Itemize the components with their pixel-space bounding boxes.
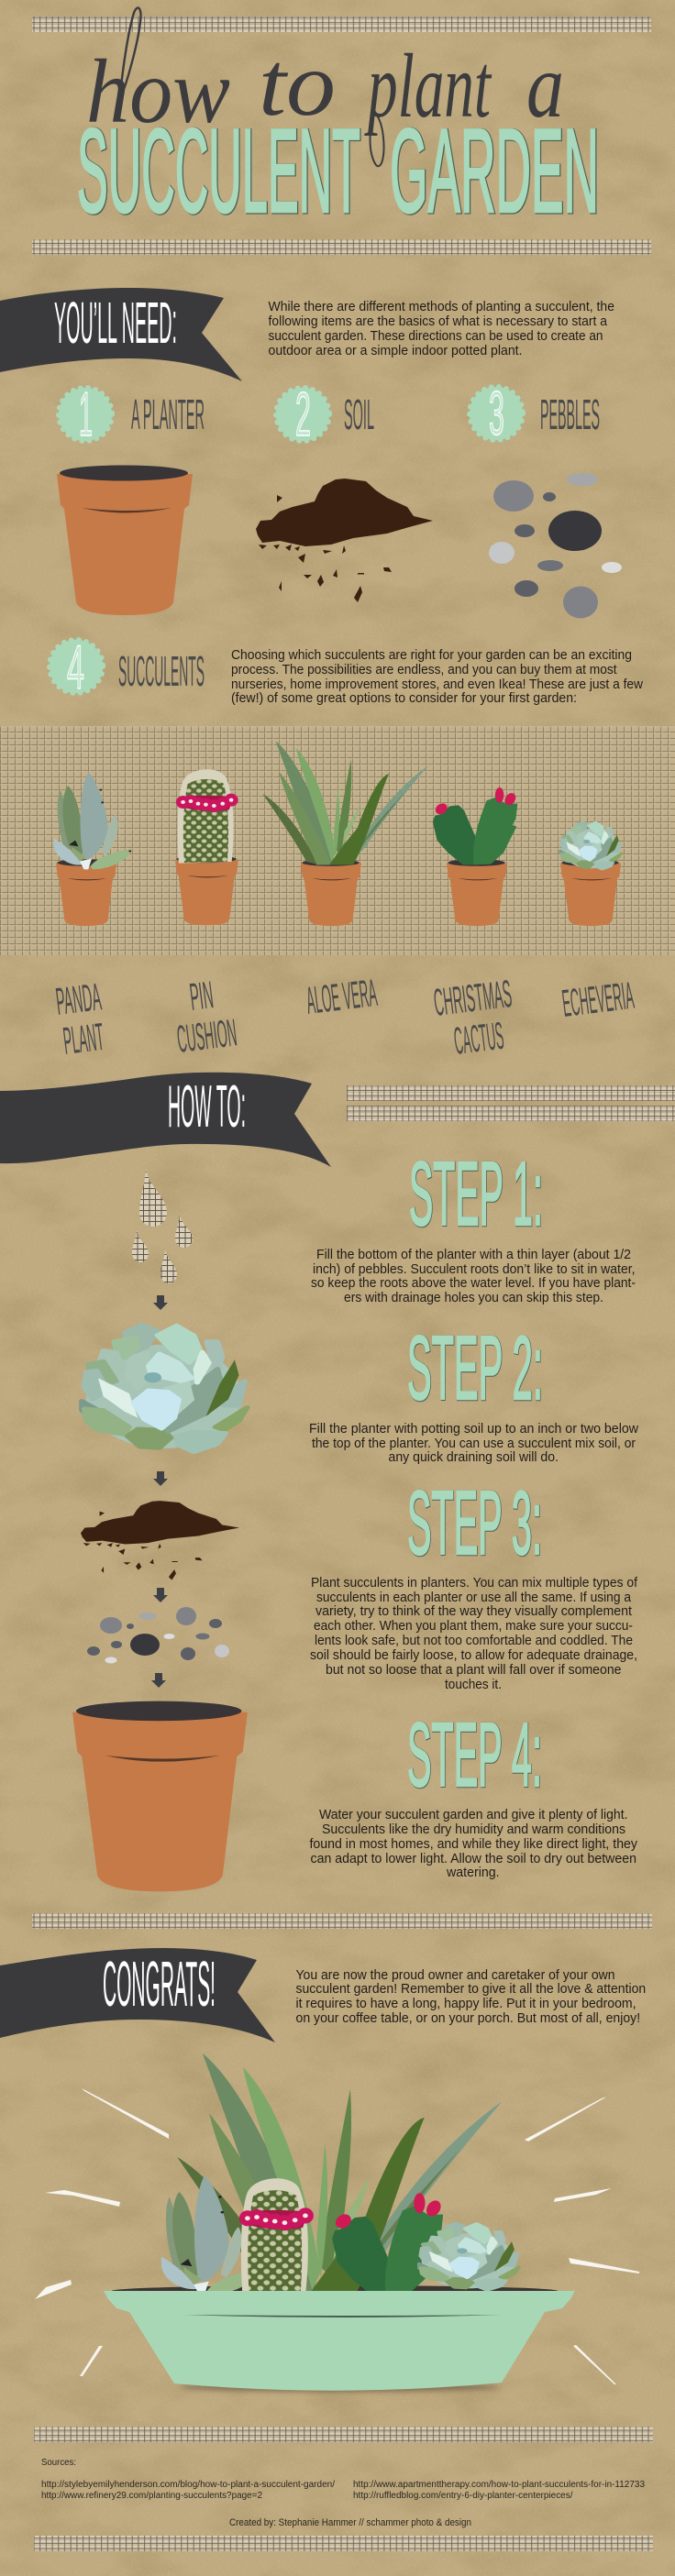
sources: http://www.refinery29.com/planting-succulents?page=2 bbox=[41, 2491, 262, 2501]
variety labels: CACTUS bbox=[451, 1014, 506, 1062]
congrats paragraph: on your coffee table, or on your porch. But most of all, enjoy! bbox=[295, 2011, 640, 2026]
script line: how to plant a: to bbox=[259, 33, 336, 135]
banner: how to: HOW TO: bbox=[168, 1073, 246, 1139]
step 2 text: any quick draining soil will do. bbox=[389, 1450, 559, 1465]
script line: how to plant a: plant bbox=[364, 35, 492, 137]
badge 3 bbox=[470, 379, 523, 448]
step 3 text: lents look safe, but not too comfortable and coddled. The bbox=[315, 1634, 633, 1648]
step 2 text: the top of the planter. You can use a succulent mix soil, or bbox=[312, 1437, 636, 1451]
badge 3: 3 bbox=[489, 379, 504, 448]
heading step 4 bbox=[407, 1704, 543, 1806]
step 4 text: watering. bbox=[446, 1866, 500, 1880]
badge 4 bbox=[50, 633, 103, 702]
sources: Sources: bbox=[41, 2458, 76, 2468]
intro paragraph: following items are the basics of what is necessary to start a bbox=[268, 314, 607, 329]
intro paragraph: outdoor area or a simple indoor potted plant. bbox=[268, 344, 523, 358]
banner: congrats bbox=[0, 1948, 275, 2042]
illustration: pebble layer bbox=[87, 1607, 229, 1663]
icon: pebbles bbox=[489, 473, 622, 618]
illustration: soil layer bbox=[81, 1501, 239, 1580]
step 2 text bbox=[309, 1422, 639, 1465]
badge 2 bbox=[276, 380, 329, 449]
plant: christmas cactus bbox=[332, 2193, 443, 2295]
sources: http://www.apartmenttherapy.com/how-to-plant-succulents-for-in-112733 bbox=[353, 2480, 645, 2490]
badge 1 bbox=[59, 380, 112, 449]
step 4 text: Water your succulent garden and give it plenty of light. bbox=[319, 1808, 627, 1822]
step 3 bbox=[310, 1472, 638, 1692]
title bbox=[77, 8, 600, 237]
arrow bbox=[153, 1588, 168, 1602]
credit line: Created by: Stephanie Hammer // schammer photo & design bbox=[229, 2517, 471, 2528]
sources bbox=[41, 2458, 645, 2501]
step 3 text: but not so loose that a plant will fall over if someone bbox=[326, 1663, 622, 1678]
step 1 text: so keep the roots above the water level. If you have plant- bbox=[311, 1276, 636, 1291]
step 3 text: touches it. bbox=[445, 1678, 502, 1692]
variety labels: CHRISTMAS bbox=[431, 972, 514, 1024]
succulents paragraph bbox=[231, 648, 644, 706]
bowl soil bbox=[112, 2285, 558, 2296]
heading step 2 bbox=[407, 1317, 543, 1419]
step 1 text: ers with drainage holes you can skip this step. bbox=[344, 1291, 603, 1305]
step 4 bbox=[310, 1704, 638, 1880]
sources: http://ruffledblog.com/entry-6-diy-planter-centerpieces/ bbox=[353, 2491, 573, 2501]
succulents paragraph: nurseries, home improvement stores, and even Ikea! These are just a few bbox=[231, 677, 644, 692]
icon: planter bbox=[57, 466, 193, 615]
sources: http://stylebyemilyhenderson.com/blog/how-to-plant-a-succulent-garden/ bbox=[41, 2480, 335, 2490]
variety labels: ALOE VERA bbox=[304, 971, 380, 1022]
step 4 text: found in most homes, and while they like direct light, they bbox=[310, 1837, 638, 1852]
plant: echeveria bbox=[419, 2223, 519, 2291]
step 3 text bbox=[310, 1576, 638, 1692]
script line: how to plant a: how bbox=[86, 40, 230, 142]
step 3 text: Plant succulents in planters. You can mix multiple types of bbox=[311, 1576, 638, 1591]
illustration: pebbles falling as drops bbox=[132, 1169, 193, 1283]
pot and pin cushion bbox=[175, 769, 238, 925]
pot and panda plant bbox=[54, 773, 131, 926]
step 3 text: variety, try to think of the way they visually complement bbox=[315, 1604, 632, 1619]
variety labels: PLANT bbox=[61, 1015, 106, 1062]
plant: pin cushion bbox=[239, 2178, 314, 2293]
step 1 text bbox=[311, 1248, 636, 1305]
script line: how to plant a bbox=[86, 8, 564, 166]
congrats paragraph: You are now the proud owner and caretaker of your own bbox=[295, 1968, 614, 1983]
succulents paragraph: process. The possibilities are endless, and you can buy them at most bbox=[231, 663, 617, 677]
step 3 text: soil should be fairly loose, to allow for adequate drainage, bbox=[310, 1648, 637, 1663]
bowl shadow bbox=[179, 2383, 500, 2392]
bowl bbox=[104, 2291, 575, 2391]
congrats paragraph bbox=[295, 1968, 646, 2026]
pot and echeveria bbox=[560, 821, 622, 926]
banner: you'll need bbox=[0, 288, 242, 381]
item 4: succulents: SUCCULENTS bbox=[118, 647, 205, 695]
item 2: soil bbox=[256, 380, 433, 602]
item 2: soil: SOIL bbox=[344, 391, 374, 438]
intro paragraph: While there are different methods of planting a succulent, the bbox=[268, 300, 614, 314]
text: CONGRATS! bbox=[103, 1948, 216, 2020]
finished succulent garden in a mint bowl bbox=[104, 2053, 575, 2392]
badge 2: 2 bbox=[295, 380, 311, 449]
banner: how to bbox=[0, 1073, 331, 1167]
chalk rays around the garden bbox=[35, 2088, 639, 2384]
text: YOU’LL NEED: bbox=[54, 290, 177, 356]
step 4 text bbox=[310, 1808, 638, 1880]
item 1: a planter bbox=[57, 380, 205, 615]
pot and christmas cactus bbox=[433, 787, 517, 926]
arrow bbox=[153, 1295, 168, 1310]
step 4 text: can adapt to lower light. Allow the soil to dry out between bbox=[310, 1852, 636, 1866]
arrow bbox=[153, 1471, 168, 1486]
step 2 bbox=[309, 1317, 639, 1465]
illustration: large echeveria bbox=[82, 1325, 247, 1452]
variety labels bbox=[53, 971, 636, 1062]
step 1 text: inch) of pebbles. Succulent roots don’t like to sit in water, bbox=[313, 1262, 635, 1277]
step 3 text: each other. When you plant them, make sure your succu- bbox=[314, 1619, 633, 1634]
congrats paragraph: succulent garden! Remember to give it all the love & attention bbox=[295, 1982, 646, 1997]
step 1 text: Fill the bottom of the planter with a thin layer (about 1/2 bbox=[316, 1248, 631, 1262]
script line: how to plant a: a bbox=[526, 35, 564, 137]
illustration: large planter bbox=[72, 1701, 248, 1891]
variety labels: CUSHION bbox=[174, 1010, 239, 1061]
heading step 3 bbox=[407, 1472, 543, 1573]
intro paragraph bbox=[268, 300, 614, 358]
text: A PLANTER bbox=[131, 391, 205, 438]
plant: panda plant bbox=[161, 2175, 259, 2295]
succulents paragraph: (few!) of some great options to consider for your first garden: bbox=[231, 691, 577, 706]
icon: soil bbox=[256, 479, 433, 602]
item 3: pebbles bbox=[470, 379, 622, 618]
badge 4: 4 bbox=[67, 633, 84, 702]
pot and aloe vera bbox=[262, 741, 428, 926]
item 4: succulents bbox=[50, 633, 644, 706]
succulents paragraph: Choosing which succulents are right for your garden can be an exciting bbox=[231, 648, 632, 663]
step 4 text: Succulents like the dry humidity and warm conditions bbox=[322, 1822, 625, 1837]
congrats paragraph: it requires to have a long, happy life. Put it in your bedroom, bbox=[295, 1997, 636, 2011]
plant: aloe vera bbox=[177, 2053, 502, 2295]
intro paragraph: succulent garden. These directions can be used to create an bbox=[268, 329, 603, 344]
step 2 text: Fill the planter with potting soil up to an inch or two below bbox=[309, 1422, 639, 1437]
step 3 text: succulents in each planter or use all the same. If using a bbox=[316, 1591, 631, 1605]
variety labels: PANDA bbox=[53, 974, 104, 1023]
panel: succulent varieties on burlap bbox=[0, 726, 675, 955]
variety labels: PIN bbox=[187, 973, 216, 1018]
badge 1: 1 bbox=[79, 380, 93, 449]
heading step 1 bbox=[409, 1143, 543, 1245]
step 1 bbox=[311, 1143, 636, 1305]
arrow bbox=[151, 1673, 166, 1688]
